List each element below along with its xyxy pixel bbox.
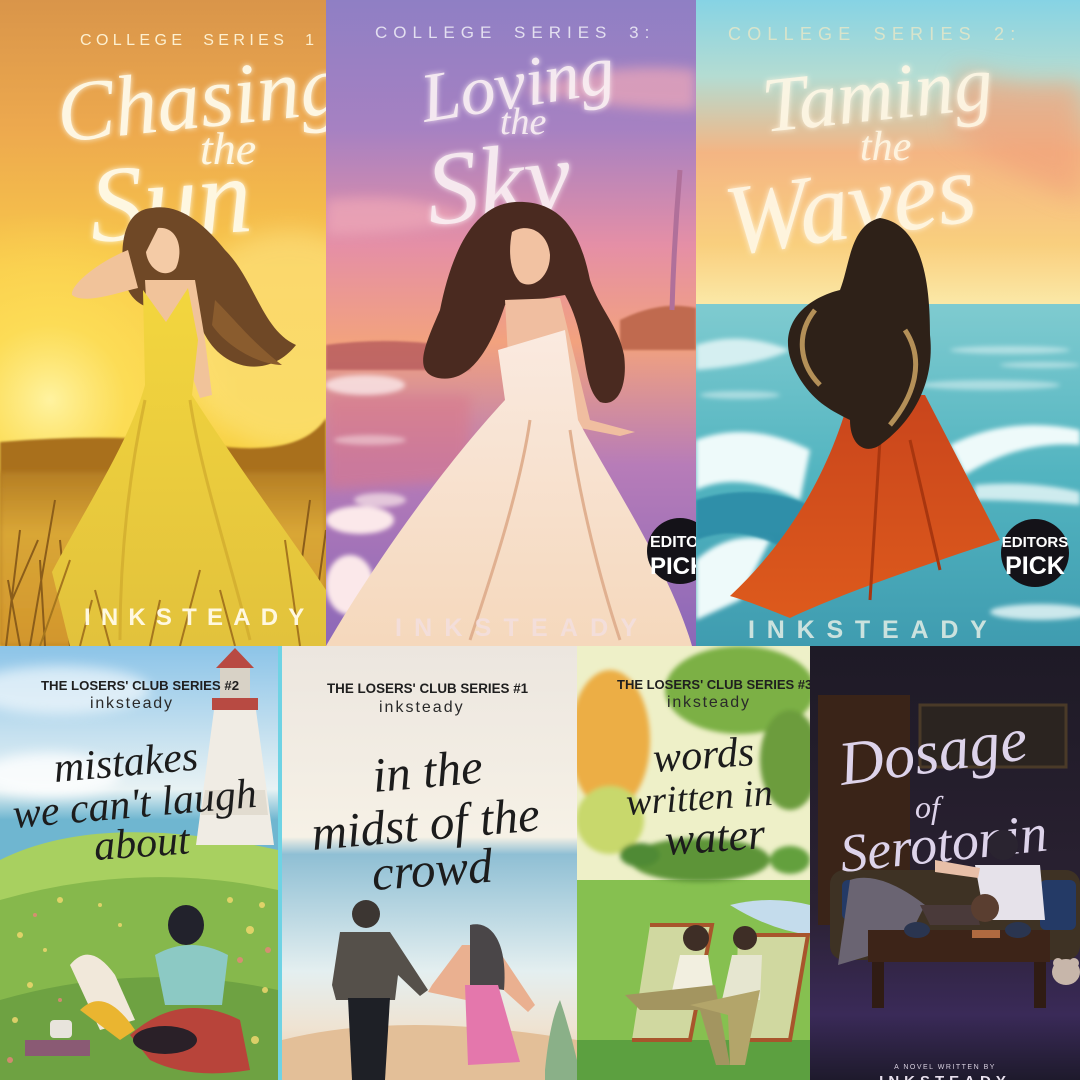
badge: editors pick: PICK [1005, 552, 1065, 580]
title: Sun [85, 136, 255, 266]
title: water [663, 809, 768, 865]
icon: table with bowls [868, 922, 1050, 1008]
title [726, 62, 992, 256]
title: Taming [758, 38, 997, 149]
illustration: woman in yellow dress [52, 207, 326, 646]
title: Serotonin [837, 803, 1050, 884]
title: the [500, 101, 547, 143]
byline: A NOVEL WRITTEN BY [894, 1064, 996, 1071]
waves [696, 339, 1080, 620]
title [841, 731, 1046, 872]
title: about [92, 817, 192, 870]
badge: editors pick [1001, 519, 1069, 587]
illustration: couple holding hands [332, 900, 535, 1080]
title: of [915, 789, 944, 825]
illustration: woman in white dress [326, 202, 692, 646]
illustration: couple on grass [25, 905, 250, 1073]
grass foreground [40, 540, 300, 646]
series label: COLLEGE SERIES 1 [80, 32, 318, 49]
badge: editors pick [647, 518, 696, 584]
title [626, 737, 772, 855]
cover: words written in water: inksteady [667, 694, 751, 711]
title: Loving [414, 31, 620, 138]
cover: in the midst of the crowd [282, 646, 577, 1080]
title: the [860, 124, 911, 170]
divider strip [278, 646, 282, 1080]
cover: in the midst of the crowd: inksteady [379, 699, 465, 716]
title: crowd [370, 838, 495, 901]
title: midst of the [309, 786, 542, 861]
title: we can't laugh [11, 771, 259, 838]
title: Chasing [52, 35, 347, 161]
illustration: couple on sofa [838, 830, 1045, 965]
cover: mistakes we can't laugh about [0, 646, 278, 1080]
cover: Taming the Waves [696, 0, 1080, 646]
cover: mistakes we can't laugh about: inksteady [90, 695, 174, 712]
illustration: couple on deck chairs [625, 925, 808, 1065]
title: Dosage [833, 705, 1032, 799]
title: Waves [718, 132, 982, 277]
badge: editors pick: EDITORS [1002, 534, 1068, 551]
series label: THE LOSERS' CLUB SERIES #1 [327, 681, 529, 696]
title: the [200, 123, 256, 174]
title: in the [370, 739, 485, 803]
flowers [12, 897, 268, 1044]
series label: COLLEGE SERIES 2: [728, 24, 1021, 44]
author: INKSTEADY [395, 614, 649, 642]
badge: editors pick: PICK [650, 553, 708, 580]
cover: words written in water [570, 646, 820, 1080]
series label: THE LOSERS' CLUB SERIES #2 [41, 678, 239, 693]
series label: COLLEGE SERIES 3: [375, 23, 655, 42]
icon: lighthouse [196, 648, 274, 845]
illustration: woman in red dress [730, 218, 1000, 618]
title: mistakes [52, 734, 200, 792]
title: written in [625, 772, 774, 824]
cover: Chasing the Sun [0, 0, 326, 646]
foliage [570, 646, 820, 882]
title [58, 62, 326, 246]
cover: Dosage of Serotonin [810, 646, 1080, 1080]
author: INKSTEADY [84, 604, 314, 631]
title [13, 744, 256, 860]
title: words [651, 729, 756, 782]
surf [325, 375, 406, 615]
cover: Loving the Sky [325, 0, 713, 646]
series label: THE LOSERS' CLUB SERIES #3 [617, 677, 812, 692]
title: Sky [420, 118, 577, 248]
title [314, 752, 538, 890]
author: INKSTEADY [748, 616, 999, 644]
icon: plush toy [1052, 958, 1080, 985]
badge: editors pick: EDITOR [650, 534, 711, 551]
title [422, 54, 614, 228]
